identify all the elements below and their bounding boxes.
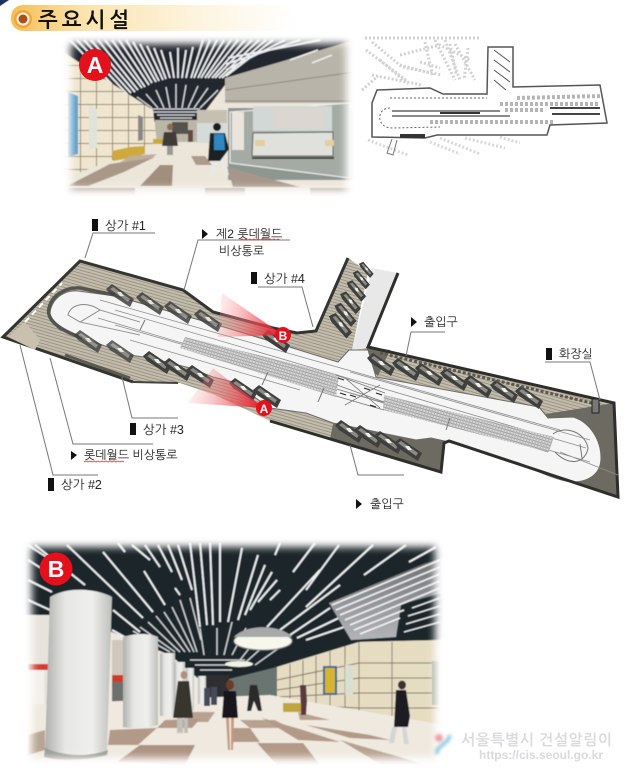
corner mark: [0, 0, 9, 6]
left wall A: [65, 54, 157, 174]
loop end details: [553, 430, 588, 462]
watermark: https://cis.seoul.go.kr: [479, 748, 603, 762]
key plan thumbnail: [362, 38, 607, 155]
people A: [162, 124, 193, 155]
label: 제2 롯데월드 비상통로: [184, 227, 290, 290]
right wall B: [277, 640, 445, 724]
badge B: B: [48, 556, 64, 582]
switch tracks: [336, 375, 385, 410]
dark gray service areas: [330, 403, 618, 497]
camera beam A: [188, 368, 264, 408]
panel: rendering B: [20, 535, 445, 770]
label: 출입구 (upper): [406, 315, 458, 356]
camera beam B: [218, 293, 283, 337]
heading: 주요 시설: 주 요 시 설: [38, 9, 129, 32]
watermark: 서울특별시 건설알림이: [461, 732, 612, 749]
left shops B: [26, 614, 50, 621]
hatched concourse base: [3, 258, 618, 497]
heading: 주요 시설: [11, 5, 296, 32]
badge A: A: [87, 52, 103, 78]
bench A: [112, 146, 145, 161]
pillars B: [44, 590, 206, 760]
people B: [173, 671, 410, 750]
station window A: [228, 108, 353, 180]
label: 상가 #2: 상가 #2: [61, 478, 102, 492]
shops: [74, 261, 543, 461]
label: 상가 #2: [20, 345, 102, 492]
floor patches A: [67, 157, 155, 186]
label: 출입구 (lower): [350, 445, 404, 511]
ceiling B: [26, 540, 442, 680]
label: 상가 #1: 상가 #1: [105, 219, 146, 233]
panel: rendering A: [60, 35, 355, 200]
track lines: [98, 300, 618, 475]
label: 롯데월드 비상통로: 롯데월드 비상통로: [84, 448, 178, 462]
floor B: [34, 694, 434, 724]
marker A: [256, 400, 272, 416]
ceiling lights B: [225, 627, 292, 667]
back hall A: [155, 120, 200, 142]
label: 화장실: 화장실: [559, 347, 593, 361]
label: 화장실: [545, 347, 600, 400]
outer walls: [3, 258, 348, 382]
badge A: [79, 49, 111, 81]
label: 상가 #4: [251, 272, 313, 327]
marker B: B: [279, 329, 288, 343]
label: 상가 #1: [85, 219, 155, 258]
inner ring wall: [49, 288, 115, 338]
marker B: [275, 327, 291, 343]
right block A: [225, 40, 355, 103]
platform patterns: [180, 337, 339, 397]
label: 제2 롯데월드 비상통로: 비상통로: [219, 244, 264, 258]
label: 제2 롯데월드 비상통로: 제2 롯데월드: [216, 227, 282, 241]
station plan: [3, 258, 618, 497]
marker A: A: [260, 402, 269, 416]
label: 롯데월드 비상통로: [50, 358, 178, 462]
ceiling A: [60, 35, 355, 122]
badge B: [40, 552, 72, 586]
label: 상가 #4: 상가 #4: [264, 272, 305, 286]
label: 출입구 (upper): 출입구: [424, 315, 458, 329]
label: 출입구 (lower): 출입구: [370, 497, 404, 511]
baffle ceiling B: [329, 558, 445, 640]
back hall B: [228, 666, 278, 697]
main white concourse: [50, 291, 601, 482]
watermark: [435, 732, 612, 762]
arm corridor: [352, 268, 398, 350]
label: 상가 #3: 상가 #3: [143, 423, 184, 437]
label: 상가 #3: [122, 377, 184, 437]
